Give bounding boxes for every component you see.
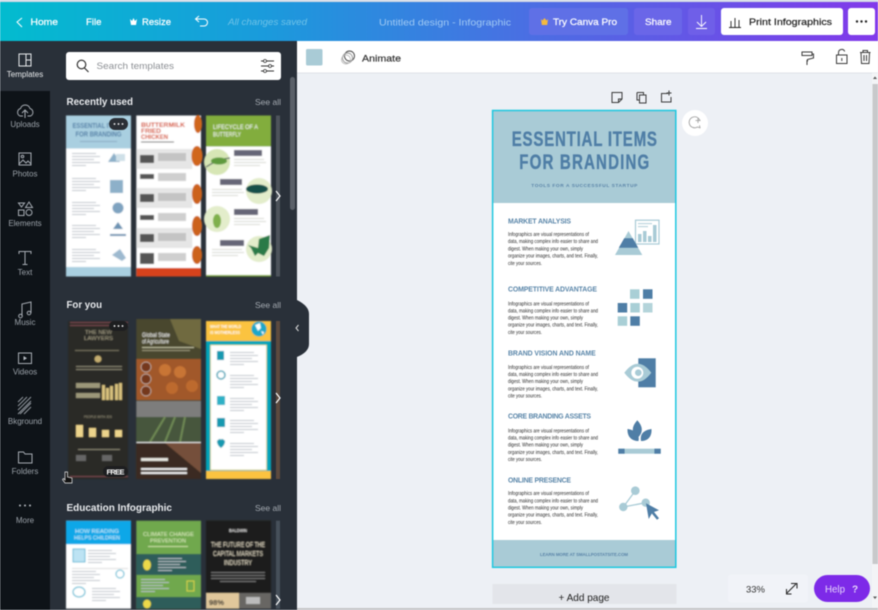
template: buttermilk fried chicken: BUTTERMILK [141, 122, 185, 129]
icon: row 1 chevron [276, 191, 280, 201]
section: brand vision and name: digest. When making your own, simply [508, 379, 583, 385]
section: core branding assets [508, 414, 661, 463]
section: competitive advantage: data, making complex info easier to share and [508, 308, 598, 314]
heading: for you: For you [66, 300, 102, 311]
tab: music: Music [15, 318, 35, 327]
left sidebar [0, 41, 50, 610]
tab: background: Bkground [8, 417, 42, 426]
free badge: FREE [106, 468, 124, 476]
template: global state of agriculture [136, 319, 201, 479]
template: buttermilk fried chicken: CHICKEN [141, 134, 168, 141]
resize menu: Resize [142, 17, 171, 28]
template: future of capital markets: THE FUTURE OF THE [211, 542, 265, 549]
title: FOR BRANDING [519, 149, 649, 174]
panel scrollbar [290, 77, 295, 210]
button: download [688, 8, 715, 35]
button: print infographics: Print Infographics [749, 17, 832, 28]
section: market analysis: cite your sources. [508, 261, 542, 267]
heading: education infographic: Education Infographic [66, 503, 172, 514]
section: online presence: cite your sources. [508, 520, 542, 526]
heading: recently used: Recently used [66, 97, 133, 108]
template: the new lawyers: THE NEW [85, 330, 112, 336]
tab: elements: Elements [8, 219, 42, 228]
section: core branding assets: cite your sources. [508, 457, 542, 463]
template: future of capital markets [206, 521, 271, 609]
template options badge [109, 118, 128, 130]
section: core branding assets: CORE BRANDING ASSETS [508, 414, 591, 421]
section: core branding assets: Infographics are visual representations of [508, 428, 590, 434]
footer band: LEARN MORE AT SMALLPOSTATSITE.COM [540, 552, 628, 557]
icons above page [612, 90, 672, 103]
section: competitive advantage: digest. When making your own, simply [508, 316, 583, 322]
selection border [493, 110, 676, 567]
template: health infographic: IS MOTHERLESS [210, 330, 240, 335]
title [512, 126, 657, 174]
zoom control: 33% [746, 584, 766, 596]
add page button [492, 584, 676, 604]
button: try canva pro [529, 8, 628, 35]
tab: elements [8, 202, 42, 228]
help button [814, 575, 870, 602]
panel collapse tab [296, 300, 309, 357]
button: share: Share [645, 17, 672, 28]
section: core branding assets: digest. When making your own, simply [508, 442, 583, 448]
top navigation bar [0, 0, 878, 41]
icon: trash [860, 50, 870, 64]
comment button [682, 110, 708, 136]
template: health infographic: WHAT THE WORLD [210, 324, 241, 329]
template: future of capital markets: CAPITAL MARKETS [213, 551, 263, 558]
context toolbar [297, 41, 878, 74]
tab: uploads [10, 105, 40, 129]
search box [66, 52, 281, 80]
tab: more: More [16, 516, 35, 525]
options badge [109, 321, 128, 331]
tab: text: Text [18, 268, 33, 277]
section: online presence: data, making complex info easier to share and [508, 498, 598, 504]
tab: folders: Folders [12, 467, 38, 476]
section: brand vision and name: BRAND VISION AND NAME [508, 351, 596, 358]
button: more options [848, 8, 875, 35]
button: try canva pro: Try Canva Pro [553, 17, 617, 28]
template: the new lawyers: LAWYERS [84, 336, 114, 342]
template: climate change prevention [136, 521, 201, 609]
template: future of capital markets: BALDWIN [229, 528, 247, 533]
section: market analysis: organize your images, charts, and text. Finally, [508, 254, 598, 260]
template: global state of agriculture: of Agriculture [142, 340, 170, 346]
icon: chart and pyramid [615, 220, 659, 255]
section: market analysis: data, making complex info easier to share and [508, 239, 598, 245]
section: market analysis [508, 218, 659, 267]
template: future of capital markets: 98% [209, 598, 224, 607]
template: the new lawyers: PEOPLE WITH JDS [84, 415, 113, 419]
section: core branding assets: organize your images, charts, and text. Finally, [508, 450, 598, 456]
next template strip [276, 321, 280, 479]
template: climate change prevention: PREVENTION [150, 538, 186, 544]
button: share [634, 8, 682, 35]
section: online presence [508, 477, 659, 526]
template: lifecycle of a butterfly: BUTTERFLY [213, 132, 241, 138]
next template strip [276, 521, 280, 609]
icon: row 2 chevron [276, 393, 280, 403]
template: essential items [66, 116, 131, 276]
zoom control [728, 574, 808, 602]
template: how reading helps children [66, 521, 131, 609]
section: brand vision and name [508, 351, 656, 400]
canvas background [297, 73, 878, 610]
colour swatch [306, 49, 322, 66]
template: essential items: FOR BRANDING [76, 132, 122, 138]
icon: network and cursor [619, 486, 659, 520]
section: brand vision and name: Infographics are visual representations of [508, 365, 590, 371]
icon: resize crown [130, 18, 137, 25]
template: essential items: ESSENTIAL ITEMS [72, 123, 125, 130]
icon: squares grid [618, 289, 652, 326]
icon: hand cursor [62, 472, 72, 483]
template: global state of agriculture: Global State [142, 333, 171, 339]
section: market analysis: digest. When making your own, simply [508, 246, 583, 252]
tab: text [18, 252, 33, 277]
active tab: templates: Templates [7, 70, 43, 79]
file menu: File [86, 17, 102, 28]
tab: folders [12, 452, 38, 476]
icon: paint roller [802, 52, 814, 65]
search box: Search templates [96, 61, 174, 72]
title: ESSENTIAL ITEMS [512, 126, 657, 151]
icon: add page [662, 90, 672, 102]
link: see all: See all [255, 97, 281, 107]
icon: back chevron [17, 18, 22, 27]
template: lifecycle of a butterfly: LIFECYCLE OF A [213, 124, 259, 131]
template: how reading helps children: HOW READING [75, 529, 119, 535]
section: competitive advantage: organize your images, charts, and text. Finally, [508, 322, 598, 328]
document title: Untitled design - Infographic [379, 18, 511, 28]
template panel [50, 41, 309, 610]
section: competitive advantage [508, 287, 652, 336]
icon: animate [342, 51, 354, 64]
section: brand vision and name: cite your sources. [508, 394, 542, 400]
tab: videos [13, 353, 37, 376]
button: print infographics [721, 8, 843, 35]
tab: photos [13, 153, 37, 178]
help button: ? [852, 584, 858, 596]
help button: Help [825, 584, 845, 596]
icon: leaves and bar [618, 420, 661, 454]
section: competitive advantage: COMPETITIVE ADVANTAGE [508, 287, 597, 294]
tab: videos: Videos [13, 368, 37, 376]
section: online presence: ONLINE PRESENCE [508, 477, 571, 484]
bottom edge [0, 608, 878, 610]
icon: undo [196, 16, 208, 26]
tab: photos: Photos [13, 170, 37, 178]
add page button: + Add page [558, 592, 610, 604]
template: climate change prevention: CLIMATE CHANGE [143, 532, 194, 538]
section: market analysis: MARKET ANALYSIS [508, 218, 571, 226]
tab: more [16, 504, 35, 525]
infographic page [493, 110, 676, 567]
icon: row 3 chevron [276, 595, 280, 605]
template: lifecycle of a butterfly [204, 116, 272, 276]
section: brand vision and name: data, making complex info easier to share and [508, 372, 598, 378]
tab: uploads: Uploads [10, 120, 40, 129]
section: online presence: digest. When making your own, simply [508, 506, 583, 512]
section: online presence: Infographics are visual representations of [508, 491, 590, 497]
icon: copy [637, 92, 646, 103]
next template strip [276, 116, 280, 276]
template: health infographic [206, 321, 271, 479]
template: future of capital markets: INDUSTRY [224, 560, 252, 567]
tab: music [15, 302, 35, 327]
section: brand vision and name: organize your images, charts, and text. Finally, [508, 386, 598, 392]
link: see all: See all [255, 300, 281, 310]
icon: unlock [836, 49, 847, 64]
template: buttermilk fried chicken: FRIED [141, 128, 161, 135]
section: competitive advantage: Infographics are visual representations of [508, 302, 590, 308]
template: the new lawyers [68, 321, 128, 479]
section: core branding assets: data, making complex info easier to share and [508, 436, 598, 442]
home link: Home [30, 17, 58, 28]
subtitle: TOOLS FOR A SUCCESSFUL STARTUP [531, 183, 638, 189]
save status: All changes saved [227, 17, 308, 28]
section: competitive advantage: cite your sources. [508, 330, 542, 336]
template: how reading helps children: HELPS CHILDREN [74, 536, 120, 542]
active tab: templates [0, 41, 50, 91]
template: buttermilk fried chicken [136, 115, 202, 276]
icon: note [612, 92, 622, 102]
canvas scrollbar [872, 73, 878, 608]
icon: eye [624, 358, 656, 387]
header band [493, 111, 676, 203]
section: online presence: organize your images, charts, and text. Finally, [508, 513, 598, 519]
tab: background [8, 397, 42, 426]
link: see all: See all [255, 503, 281, 513]
animate label: Animate [362, 54, 401, 64]
footer band [493, 540, 676, 567]
section: market analysis: Infographics are visual representations of [508, 232, 590, 238]
free badge [103, 466, 128, 477]
